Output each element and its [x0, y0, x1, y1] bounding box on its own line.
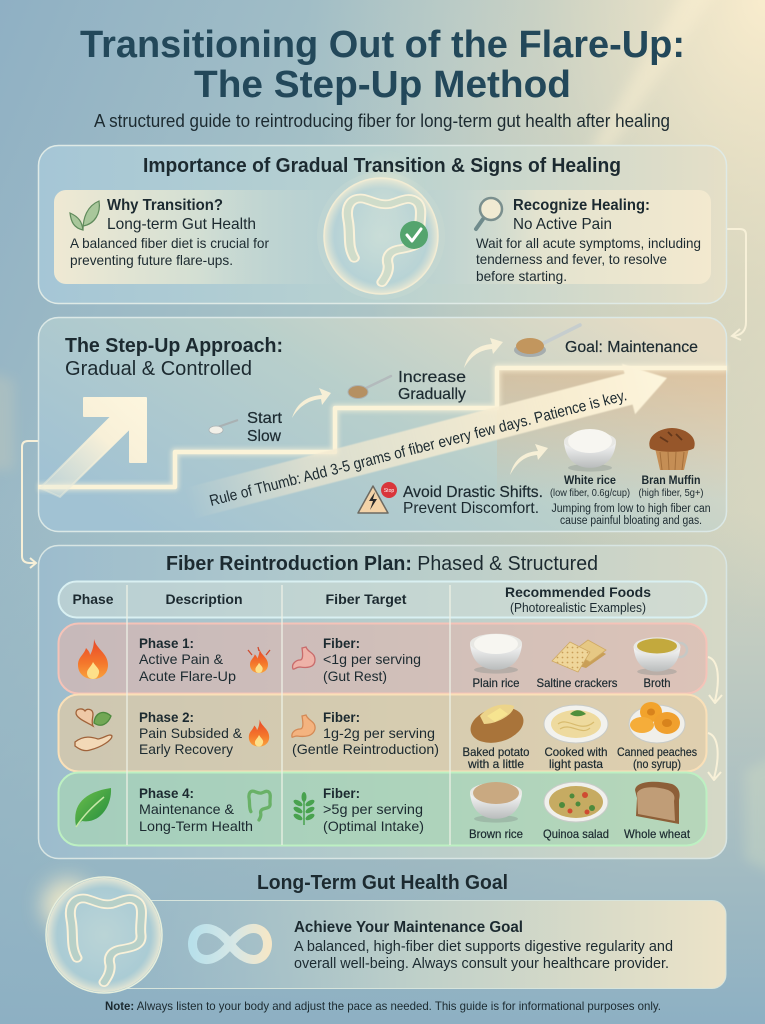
- food: baked potato: [462, 702, 530, 771]
- text: achieve your maintenance goal: Achieve Your Maintenance Goal: [294, 919, 523, 936]
- food: plain rice: [470, 634, 522, 690]
- label: increase gradually: [398, 369, 466, 403]
- food: light pasta: [544, 705, 608, 771]
- text: phase 2 fiber target: 1g-2g per serving: [323, 725, 435, 741]
- text: food comparison: (high fiber, 5g+): [638, 488, 704, 499]
- text: phase 1 fiber target: [323, 635, 421, 684]
- text: achieve your maintenance goal: A balanced, high-fiber diet supports digestive regularity and: [294, 938, 673, 955]
- food: broth cup: Broth: [644, 676, 670, 690]
- subtitle: A structured guide to reintroducing fiber for long-term gut health after healing: [94, 111, 670, 131]
- arrow: phase 1 to phase 2: [708, 657, 722, 703]
- text: phase 4 description: [139, 785, 253, 834]
- text: avoid drastic shifts: Avoid Drastic Shifts.: [403, 484, 543, 501]
- text: phase 4 fiber target: (Optimal Intake): [323, 818, 424, 834]
- text: avoid drastic shifts: [403, 484, 543, 517]
- icon: leaf sprout: [70, 201, 99, 230]
- table header: Phase: [72, 591, 114, 607]
- icon: small green colon: [249, 791, 270, 820]
- text: food comparison: White rice: [564, 473, 616, 487]
- heading: importance: Importance of Gradual Transition & Signs of Healing: [143, 154, 621, 177]
- connector arrow: panel 2 to panel 3: [22, 441, 38, 568]
- text: food comparison: [550, 473, 710, 527]
- text: why transition: preventing future flare-ups.: [70, 252, 233, 268]
- food: quinoa salad: [543, 782, 609, 841]
- staircase line: [38, 368, 727, 487]
- text: recognize healing: before starting.: [476, 268, 567, 284]
- label: start slow: [247, 410, 283, 445]
- label: start slow: Start: [247, 410, 283, 427]
- label: increase gradually: Increase: [398, 369, 466, 386]
- text: why transition: [70, 197, 269, 268]
- title: The Step-Up Method: [194, 64, 571, 106]
- label: increase gradually: Gradually: [398, 386, 466, 403]
- icon: colon in glowing orb, bottom: [42, 877, 162, 993]
- arrow: curved to goal: [464, 338, 503, 368]
- text: phase 1 description: Phase 1:: [139, 635, 194, 651]
- text: food comparison: Bran Muffin: [642, 473, 700, 487]
- text: recognize healing: No Active Pain: [513, 216, 612, 233]
- table header: Fiber Target: [326, 591, 407, 607]
- text: recognize healing: [476, 197, 701, 284]
- staircase shading: [497, 368, 726, 500]
- icon: small flame: [249, 719, 269, 747]
- icon: green leaf: [75, 788, 111, 827]
- food: canned peaches: Canned peaches: [617, 745, 697, 759]
- text: achieve your maintenance goal: overall well-being. Always consult your healthcare provider.: [294, 955, 669, 972]
- icon: colon in glowing orb: [317, 168, 445, 300]
- food: plain rice: Plain rice: [472, 676, 520, 690]
- icon: green check badge: [400, 221, 428, 249]
- text: phase 4 fiber target: >5g per serving: [323, 801, 423, 817]
- table header: Recommended Foods: [505, 584, 651, 600]
- icon: hand with heart and leaf: [75, 709, 112, 751]
- text: recognize healing: Wait for all acute symptoms, including: [476, 235, 701, 251]
- text: phase 4 description: Long-Term Health: [139, 818, 253, 834]
- table header: (Photorealistic Examples): [510, 601, 646, 615]
- table header: [58, 582, 706, 618]
- heading: fiber reintroduction plan: Fiber Reintroduction Plan: Phased & Structured: [166, 552, 598, 575]
- icon: large spoon: [514, 325, 580, 357]
- label: start slow: Slow: [247, 428, 281, 445]
- text: phase 1 fiber target: (Gut Rest): [323, 668, 387, 684]
- text: why transition: Long-term Gut Health: [107, 216, 256, 233]
- icon: big rising arrow: [40, 398, 146, 497]
- food: brown rice: [469, 782, 523, 841]
- food: saltine crackers: [536, 640, 618, 690]
- food: baked potato: with a little: [467, 757, 524, 771]
- icon: small flame with sparks: [248, 647, 270, 673]
- text: phase 2 description: Phase 2:: [139, 709, 194, 725]
- text: phase 2 description: Early Recovery: [139, 741, 233, 757]
- icon: stomach: [292, 715, 315, 737]
- text: why transition: A balanced fiber diet is crucial for: [70, 235, 269, 251]
- text: food comparison: (low fiber, 0.6g/cup): [550, 488, 630, 499]
- panel: fiber reintroduction plan: [38, 546, 726, 1013]
- text: phase 4 description: Maintenance &: [139, 801, 235, 817]
- step: start slow: [209, 410, 283, 445]
- table row: phase 2: [58, 694, 706, 772]
- icon: stomach: [293, 647, 315, 669]
- food: brown rice: Brown rice: [469, 827, 523, 841]
- icon: warning triangle with stop sign: [358, 482, 397, 513]
- text: food comparison: cause painful bloating and gas.: [560, 515, 702, 527]
- text: phase 1 fiber target: <1g per serving: [323, 651, 421, 667]
- heading: step-up approach: [65, 334, 283, 380]
- arrow: rule of thumb band: [182, 354, 674, 529]
- panel: maintenance goal: [110, 900, 726, 988]
- food: quinoa salad: Quinoa salad: [543, 827, 609, 841]
- title: Transitioning Out of the Flare-Up:: [80, 24, 685, 66]
- food: baked potato: Baked potato: [462, 745, 530, 759]
- text: phase 1 fiber target: Fiber:: [323, 635, 360, 651]
- icon: medium spoon: [348, 376, 391, 398]
- icon: wheat: [292, 792, 316, 825]
- text: phase 4 description: Phase 4:: [139, 785, 194, 801]
- text: phase 2 fiber target: Fiber:: [323, 709, 360, 725]
- label: goal maintenance: Goal: Maintenance: [565, 339, 698, 356]
- icon: magnifier: [476, 198, 502, 229]
- step: goal maintenance: [514, 325, 698, 357]
- text: rule of thumb: Rule of Thumb: Add 3-5 grams of fiber every few days. Patience is key.: [208, 387, 629, 510]
- text: recognize healing: Recognize Healing:: [513, 197, 650, 214]
- icon: warning triangle with stop sign: Stop: [384, 488, 394, 494]
- text: avoid drastic shifts: Prevent Discomfort.: [403, 500, 539, 517]
- text: achieve your maintenance goal: [294, 919, 673, 972]
- note: Note: Always listen to your body and adjust the pace as needed. This guide is for informational purposes only.: [105, 999, 661, 1013]
- food: whole wheat bread: [624, 782, 691, 841]
- step: increase gradually: [348, 369, 466, 403]
- text: recognize healing: tenderness and fever, to resolve: [476, 251, 667, 267]
- food: light pasta: light pasta: [549, 757, 603, 771]
- food: whole wheat bread: Whole wheat: [624, 827, 691, 841]
- arrow: phase 2 to phase 4: [708, 733, 721, 780]
- heading: step-up approach: The Step-Up Approach:: [65, 334, 283, 357]
- heading: long-term gut health goal: Long-Term Gut Health Goal: [257, 871, 508, 894]
- card: why transition: [54, 190, 344, 284]
- arrow: curved to increase: [292, 388, 331, 418]
- food: white rice bowl: [564, 429, 616, 472]
- table header: Description: [166, 591, 242, 607]
- icon: infinity loop: [192, 928, 268, 960]
- text: phase 4 fiber target: Fiber:: [323, 785, 360, 801]
- icon: small spoon: [209, 420, 238, 434]
- arrow: curved to foods: [510, 444, 548, 475]
- text: phase 1 description: [139, 635, 236, 684]
- table row: phase 1: [58, 624, 706, 694]
- panel: importance of gradual transition: [38, 146, 726, 304]
- food: broth cup: [634, 637, 687, 690]
- text: food comparison: Jumping from low to high fiber can: [552, 503, 710, 515]
- title: [80, 24, 685, 106]
- connector arrow: panel 1 to panel 2: [727, 229, 746, 340]
- heading: step-up approach: Gradual & Controlled: [65, 357, 252, 380]
- table row: phase 4: [58, 585, 722, 846]
- text: phase 1 description: Acute Flare-Up: [139, 668, 236, 684]
- text: why transition: Why Transition?: [107, 197, 223, 214]
- text: phase 2 description: [139, 709, 243, 757]
- text: phase 1 description: Active Pain &: [139, 651, 224, 667]
- panel: step-up approach: [38, 318, 727, 532]
- icon: large flame: [78, 639, 108, 679]
- card: recognize healing: [421, 190, 711, 284]
- text: phase 2 fiber target: [292, 709, 439, 757]
- food: canned peaches: (no syrup): [633, 757, 681, 771]
- food: light pasta: Cooked with: [544, 745, 608, 759]
- text: phase 2 description: Pain Subsided &: [139, 725, 243, 741]
- food: canned peaches: [617, 702, 697, 771]
- text: phase 2 fiber target: (Gentle Reintroduction): [292, 741, 439, 757]
- text: phase 4 fiber target: [323, 785, 424, 834]
- table column dividers: [127, 585, 450, 845]
- food: bran muffin: [649, 428, 695, 470]
- food: saltine crackers: Saltine crackers: [536, 676, 618, 690]
